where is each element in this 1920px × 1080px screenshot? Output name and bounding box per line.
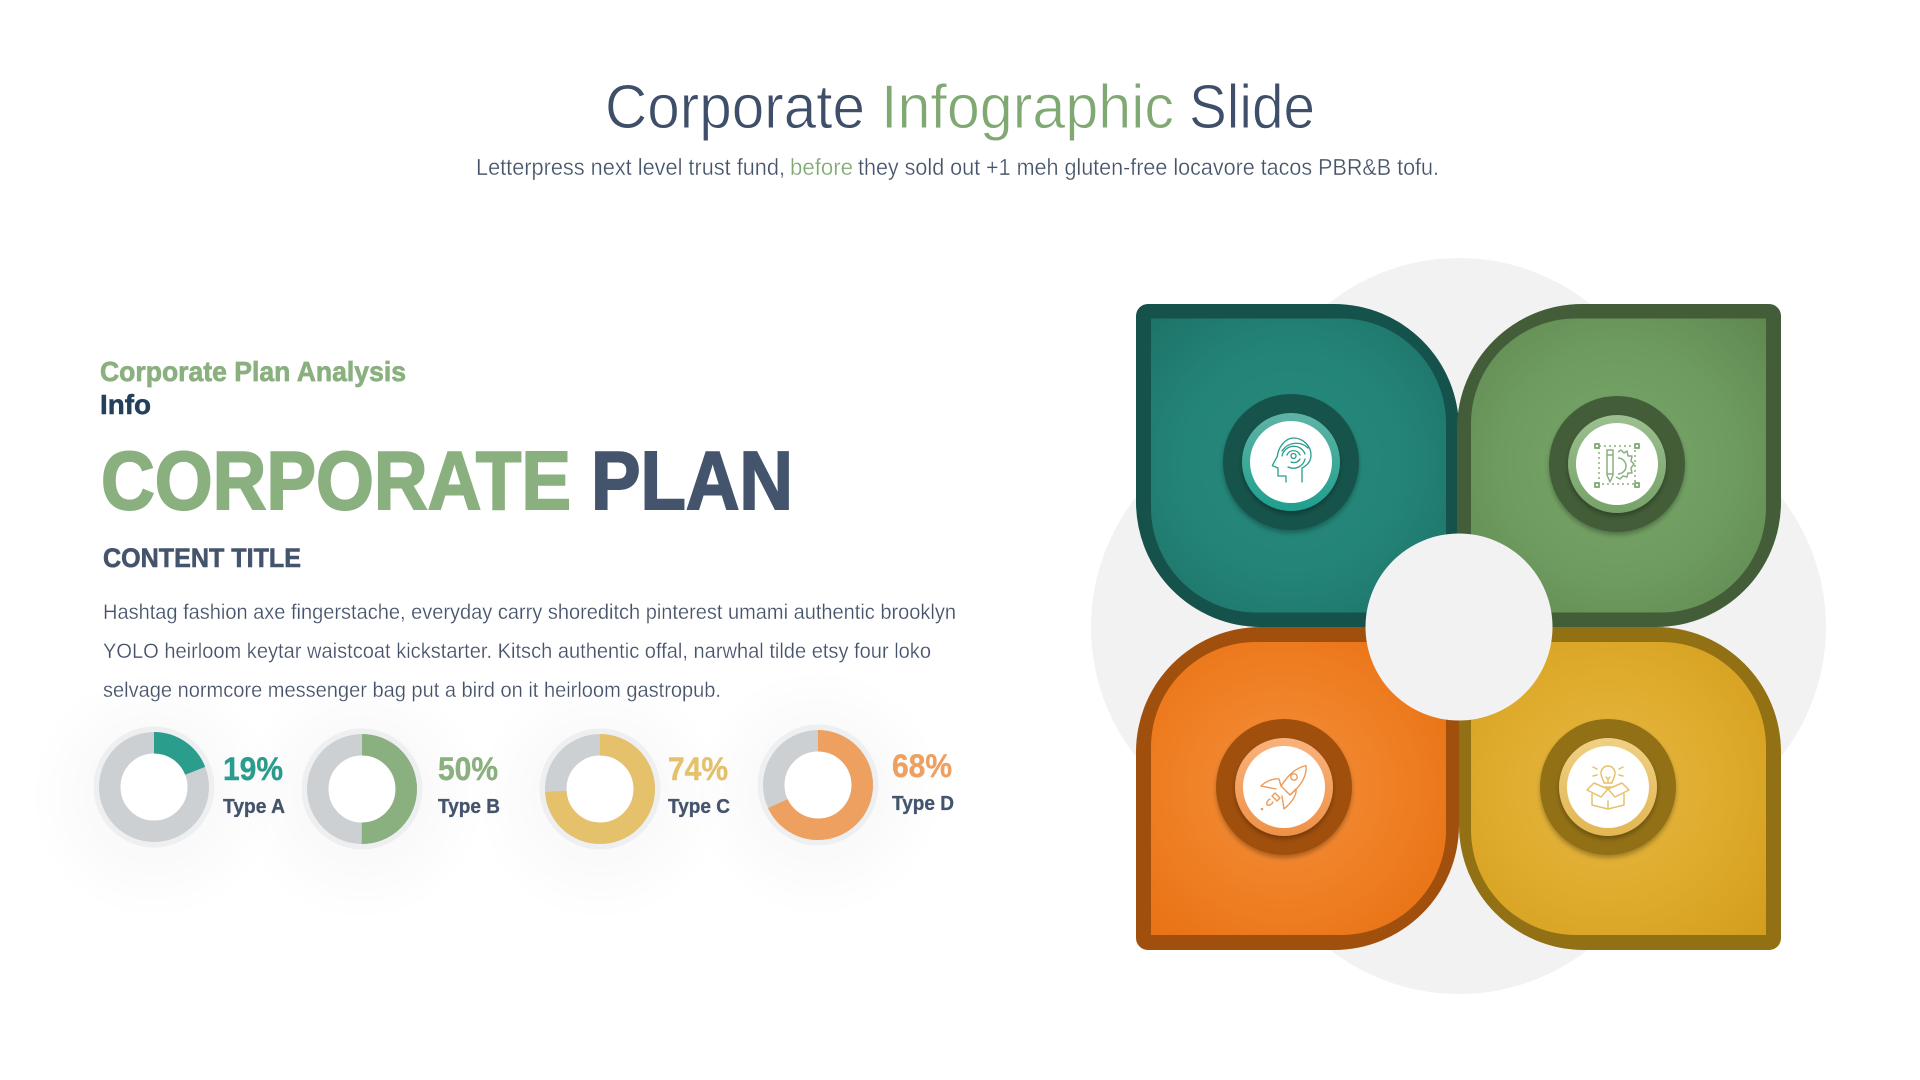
title: Corporate: [605, 73, 865, 142]
body text: [103, 601, 956, 702]
icon: head with maze: [1223, 394, 1359, 530]
icon: pencil and gear: [1549, 396, 1685, 532]
subtitle: before: [790, 154, 853, 180]
donut: Type C 74%: 74%: [668, 751, 728, 787]
donut: Type C 74%: [475, 672, 730, 922]
panel: yellow quadrant: [1459, 627, 1781, 950]
donut: Type B 50%: 50%: [438, 751, 498, 787]
panel: orange quadrant: [1136, 627, 1459, 950]
eyebrow heading: Corporate Plan Analysis: Corporate Plan Analysis: [100, 356, 406, 387]
body text: YOLO heirloom keytar waistcoat kickstarter. Kitsch authentic offal, narwhal tilde etsy four loko: [103, 640, 931, 663]
subtitle: [476, 154, 1439, 180]
donut: Type A 19%: Type A: [223, 796, 285, 818]
body text: Hashtag fashion axe fingerstache, everyday carry shoreditch pinterest umami authentic brooklyn: [103, 601, 956, 624]
donut: Type C 74%: Type C: [668, 796, 730, 818]
donut: Type B 50%: [237, 672, 500, 922]
icon: box with lightbulb: [1540, 719, 1676, 855]
donut: Type B 50%: Type B: [438, 796, 500, 818]
main heading: CORPORATE: [101, 434, 571, 527]
icon: rocket: [1216, 719, 1352, 855]
title: Infographic: [881, 73, 1174, 142]
body text: selvage normcore messenger bag put a bird on it heirloom gastropub.: [103, 679, 721, 702]
donut: Type D 68%: 68%: [892, 748, 952, 784]
background shape: four grey lobes: [1091, 258, 1826, 994]
eyebrow heading: Info: Info: [100, 389, 151, 420]
title: [605, 73, 1315, 142]
content title: CONTENT TITLE: [103, 543, 301, 573]
donut: Type A 19%: [29, 670, 285, 920]
main heading: PLAN: [591, 434, 793, 527]
center circle: [1366, 534, 1552, 720]
donut: Type D 68%: [693, 668, 954, 918]
title: Slide: [1189, 73, 1315, 142]
subtitle: they sold out +1 meh gluten-free locavore tacos PBR&B tofu.: [858, 154, 1439, 180]
panel: teal quadrant: [1136, 304, 1459, 627]
subtitle: Letterpress next level trust fund,: [476, 154, 785, 180]
donut: Type A 19%: 19%: [223, 751, 283, 787]
donut: Type D 68%: Type D: [892, 793, 954, 815]
panel: green quadrant: [1457, 304, 1781, 627]
